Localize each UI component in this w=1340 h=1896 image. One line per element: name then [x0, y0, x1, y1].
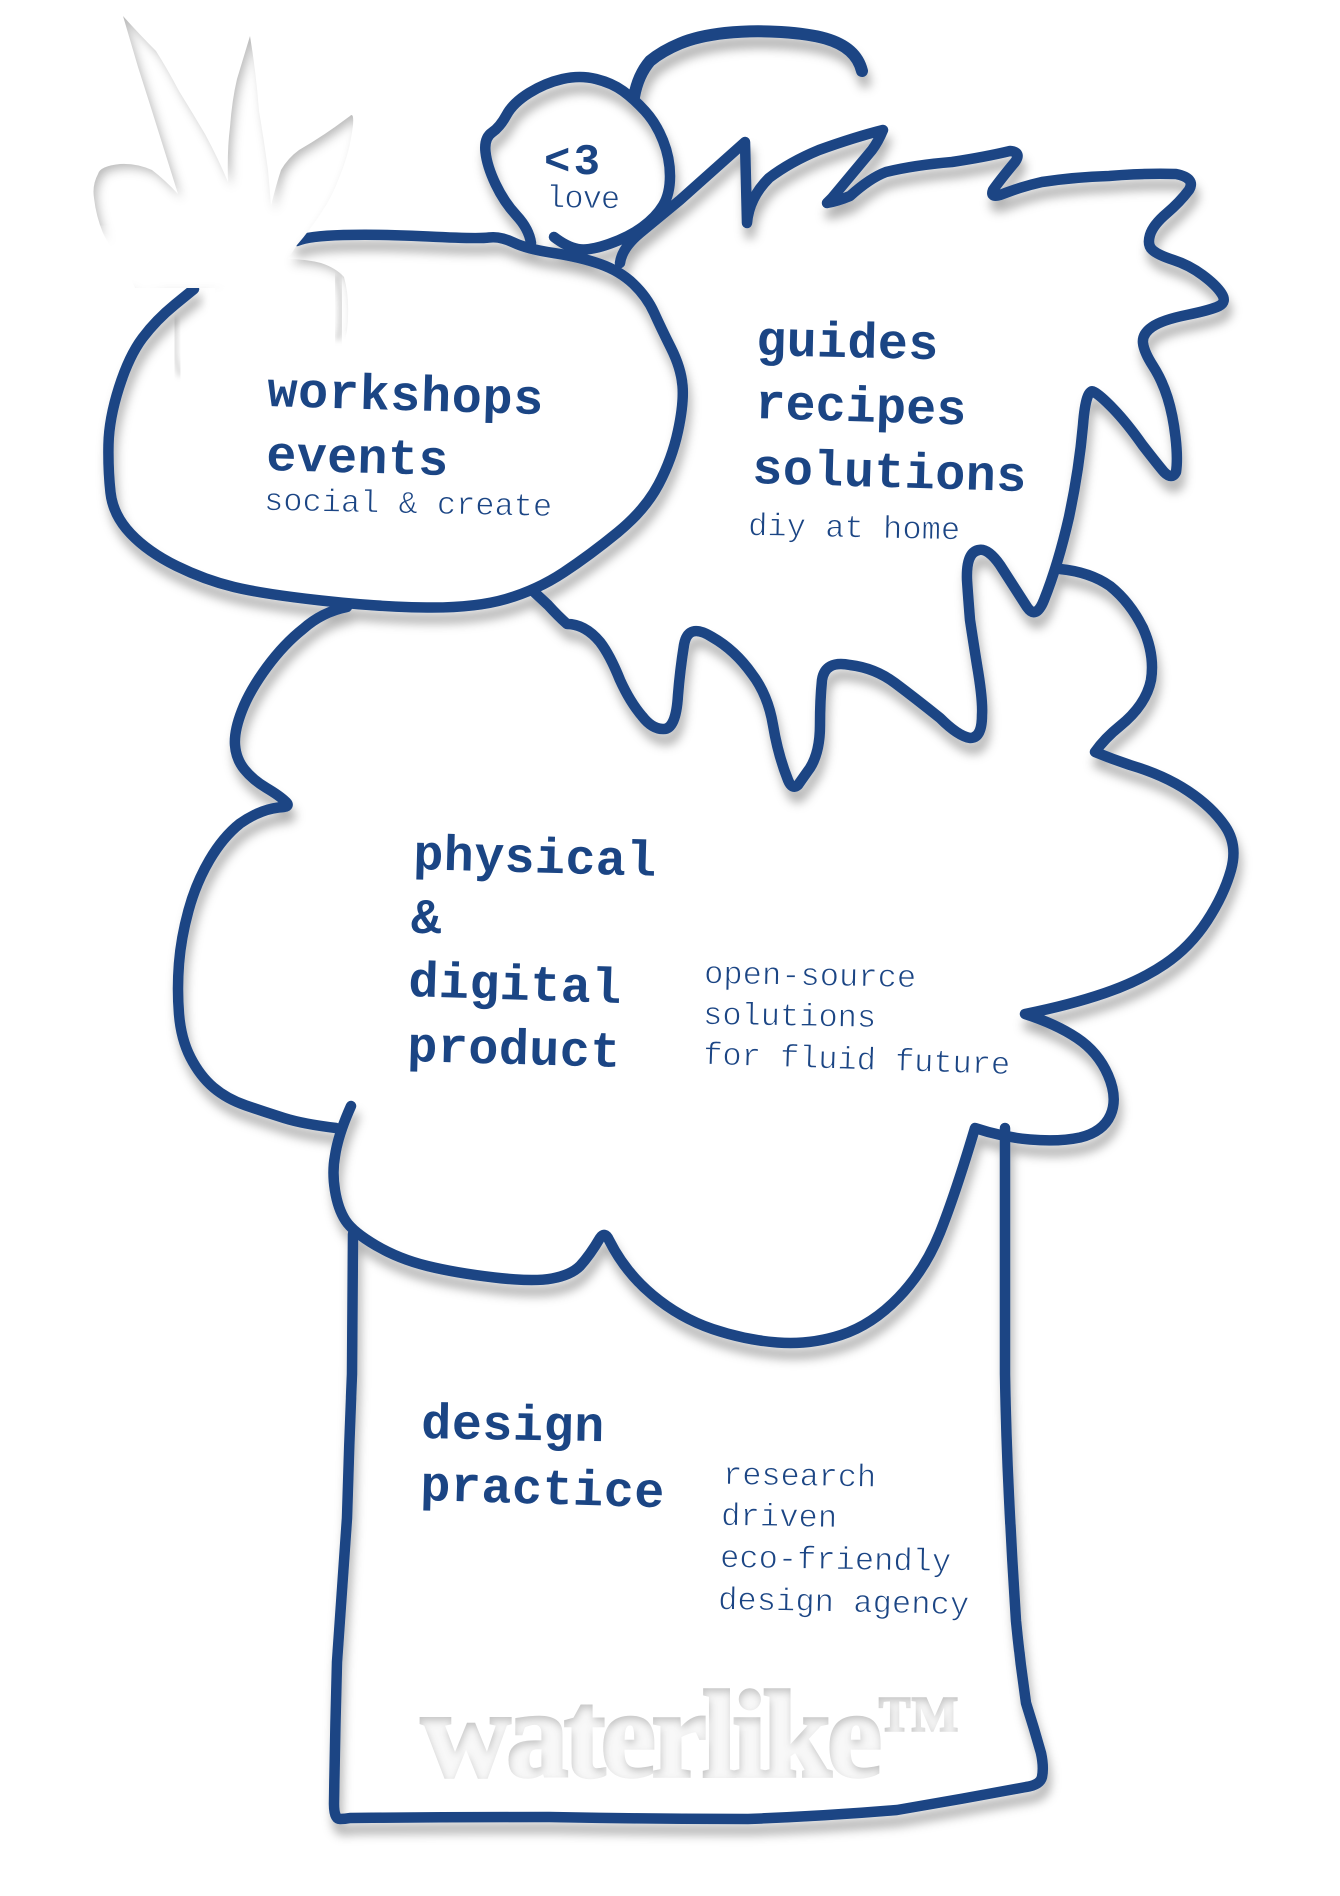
open-source caption: open-source: [704, 956, 916, 997]
solutions heading: solutions: [752, 442, 1027, 507]
plant right lobe shade: [336, 276, 341, 340]
text: physical and digital block: [407, 828, 1011, 1084]
outline: love circle: [485, 77, 670, 249]
plant left lobe fade: [85, 232, 160, 294]
design agency caption: design agency: [718, 1582, 970, 1624]
solutions caption: solutions: [703, 997, 876, 1037]
plant lower left shade: [175, 318, 180, 376]
hand-drawn outlines: [108, 31, 1233, 1819]
embossed white plant: [85, 16, 360, 376]
trademark sign: ™: [876, 1679, 960, 1772]
love label: love: [546, 180, 620, 218]
outline: physical and digital cloud, lower and right part: [334, 569, 1233, 1343]
plant lower fade patch: [208, 287, 336, 362]
design heading: design: [421, 1397, 605, 1457]
plant body: [94, 16, 353, 345]
outline: workshops blob: [108, 235, 683, 608]
outline: guides spiky leaf: [533, 130, 1224, 787]
diy at home caption: diy at home: [748, 508, 961, 549]
outline: love curl: [634, 31, 862, 97]
for fluid future caption: for fluid future: [703, 1037, 1011, 1084]
product heading: product: [407, 1020, 621, 1083]
ampersand: &: [411, 892, 441, 949]
events heading: events: [266, 429, 449, 491]
text: guides block: [748, 314, 1027, 549]
text: love: [544, 138, 620, 218]
text: design practice block: [420, 1397, 970, 1624]
embossed waterlike logo: [421, 1666, 960, 1803]
waterlike wordmark: waterlike: [421, 1666, 882, 1803]
heart emoticon: <3: [544, 138, 600, 188]
physical heading: physical: [413, 828, 657, 892]
digital heading: digital: [407, 955, 622, 1019]
text: workshops block: [264, 365, 553, 526]
eco-friendly caption: eco-friendly: [720, 1540, 951, 1581]
workshops heading: workshops: [267, 365, 544, 430]
driven caption: driven: [721, 1498, 837, 1537]
social and create caption: social & create: [264, 483, 553, 526]
recipes heading: recipes: [754, 377, 967, 441]
guides heading: guides: [756, 314, 939, 375]
outline: physical and digital cloud, left part: [178, 607, 347, 1128]
practice heading: practice: [420, 1459, 665, 1523]
plant bottom edge fade: [250, 335, 360, 375]
outline: design practice box: [334, 1128, 1043, 1819]
research caption: research: [723, 1457, 876, 1497]
